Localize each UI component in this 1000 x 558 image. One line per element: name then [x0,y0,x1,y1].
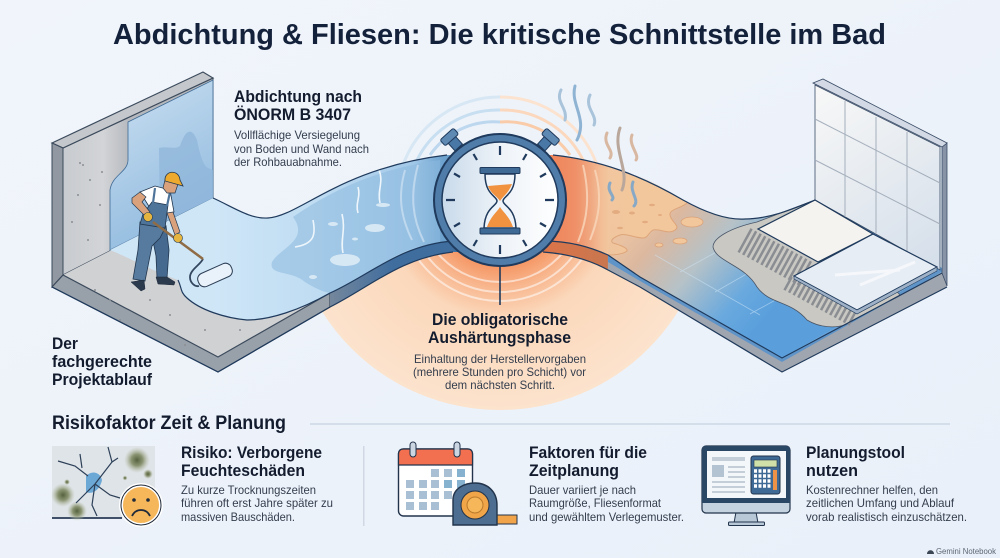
text block: curing phase: (mehrere Stunden pro Schicht) vor [413,365,586,379]
floor front side [52,275,330,372]
heading: Der fachgerechte Projektablauf: fachgerechte [52,352,152,371]
faint grid on blue membrane [655,250,790,315]
text block: Abdichtung nach ÖNORM: Abdichtung nach [234,87,362,106]
concrete speckles [71,162,241,346]
back leg [152,226,169,278]
notched trowel ridges [744,240,853,319]
roller wire [190,259,203,286]
shoes [131,280,145,291]
text block: hidden moisture damage: Feuchteschäden [181,461,305,480]
text block: hidden moisture damage: Risiko: Verborgene [181,443,322,462]
head [163,180,178,193]
right arm [167,212,180,235]
panel: curved ribbon from sealing to curing [110,155,720,320]
blue sealing on wall [110,80,213,250]
text block: factors for time planning: Raumgröße, Fliesenformat [529,496,662,510]
floor side face gray [608,255,947,372]
tile wall top frame [813,79,947,147]
text block: factors for time planning: und gewähltem Verlegemuster. [529,510,684,524]
text block: Abdichtung nach ÖNORM: Vollflächige Versiegelung [234,128,360,142]
wall tiles [815,85,940,270]
shirt [140,186,174,214]
text block: curing phase: Die obligatorische [432,310,568,329]
connector line [499,266,501,305]
rim [434,134,566,266]
text block: planning tool: nutzen [806,461,858,480]
text block: factors for time planning: Zeitplanung [529,461,619,480]
ribbon side face [330,241,608,307]
panel: right tiled corner [52,79,947,372]
text block: curing phase [413,310,586,392]
hourglass [480,168,520,234]
text block: factors for time planning: Dauer variiert je nach [529,483,636,497]
left arm [132,192,150,217]
steam wisps [559,86,637,206]
icon: calendar and tape measure [398,442,517,525]
text block: planning tool [806,443,967,524]
hard hat [165,172,183,186]
drip shape on wall [159,132,213,224]
heading: Risikofaktor Zeit & Planung: Risikofaktor Zeit & Planung [52,413,286,434]
wall-side frame strip [942,143,947,286]
puddles and wisps [309,203,390,279]
text block: planning tool: zeitlichen Umfang und Ablauf [806,496,955,510]
peach glow circle behind curing phase [322,252,678,410]
tick marks [446,146,554,254]
dial face [442,142,558,258]
crown right [535,128,560,153]
text block: hidden moisture damage: Zu kurze Trocknungszeiten [181,483,316,497]
concrete wall [63,78,213,275]
sad face [121,485,161,525]
darker water area [272,160,440,293]
wall top edge [52,72,213,148]
peach speckles [612,204,662,229]
title: Abdichtung & Fliesen: Die kritische Schnittstelle im Bad [113,19,886,51]
concentric timer rings [403,97,597,165]
floor top surface [608,165,942,358]
tape measure [453,483,517,525]
stopwatch [434,128,566,266]
damp patch outline [608,203,687,255]
mortar bed [713,200,900,327]
text block: hidden moisture damage [181,443,333,524]
icon: worker with paint roller [131,172,234,291]
watermark: Gemini Notebook [936,547,997,556]
heading: Der fachgerechte Projektablauf: Der [52,334,78,353]
floor tile two [794,234,937,310]
tile grout lines [815,101,940,252]
text block: planning tool: Kostenrechner helfen, den [806,483,938,497]
heading: Der fachgerechte Projektablauf: Projektablauf [52,370,152,389]
heading: Der fachgerechte Projektablauf [52,334,152,389]
front leg [133,222,166,281]
roller [196,261,234,289]
text block: factors for time planning [529,443,684,524]
text block: planning tool: vorab realistisch einzuschätzen. [806,510,967,524]
text block: hidden moisture damage: massiven Bauschäden. [181,510,295,524]
crown left [440,128,465,153]
concrete floor [63,198,330,357]
floor tile one [758,200,873,262]
text block: Abdichtung nach ÖNORM: von Boden und Wand nach [234,142,369,156]
gloves [144,212,152,222]
ribbon outline edges [52,155,947,372]
ribbon top surface [110,155,720,320]
overalls bib [140,202,168,228]
text block: Abdichtung nach ÖNORM: ÖNORM B 3407 [234,105,351,124]
text block: curing phase: Aushärtungsphase [428,328,571,347]
floor side blue membrane strip [608,255,942,362]
text block: Abdichtung nach ÖNORM: der Rohbauabnahme. [234,155,342,169]
text block: curing phase: Einhaltung der Herstellervorgaben [414,352,586,366]
text block: Abdichtung nach ÖNORM [234,87,369,169]
panel: left room waterproofing [52,72,330,372]
peach damp patch [592,165,687,255]
text block: factors for time planning: Faktoren für die [529,443,647,462]
motion lines [401,165,599,242]
icon: monitor with calculator [702,446,790,526]
icon: cracked damp wall with sad face [51,446,161,525]
text block: curing phase: dem nächsten Schritt. [445,378,555,392]
text block: hidden moisture damage: führen oft erst Jahre später zu [181,496,333,510]
text block: planning tool: Planungstool [806,443,905,462]
calculator [751,456,780,494]
roller handle [153,222,203,259]
wall end face [52,143,63,287]
